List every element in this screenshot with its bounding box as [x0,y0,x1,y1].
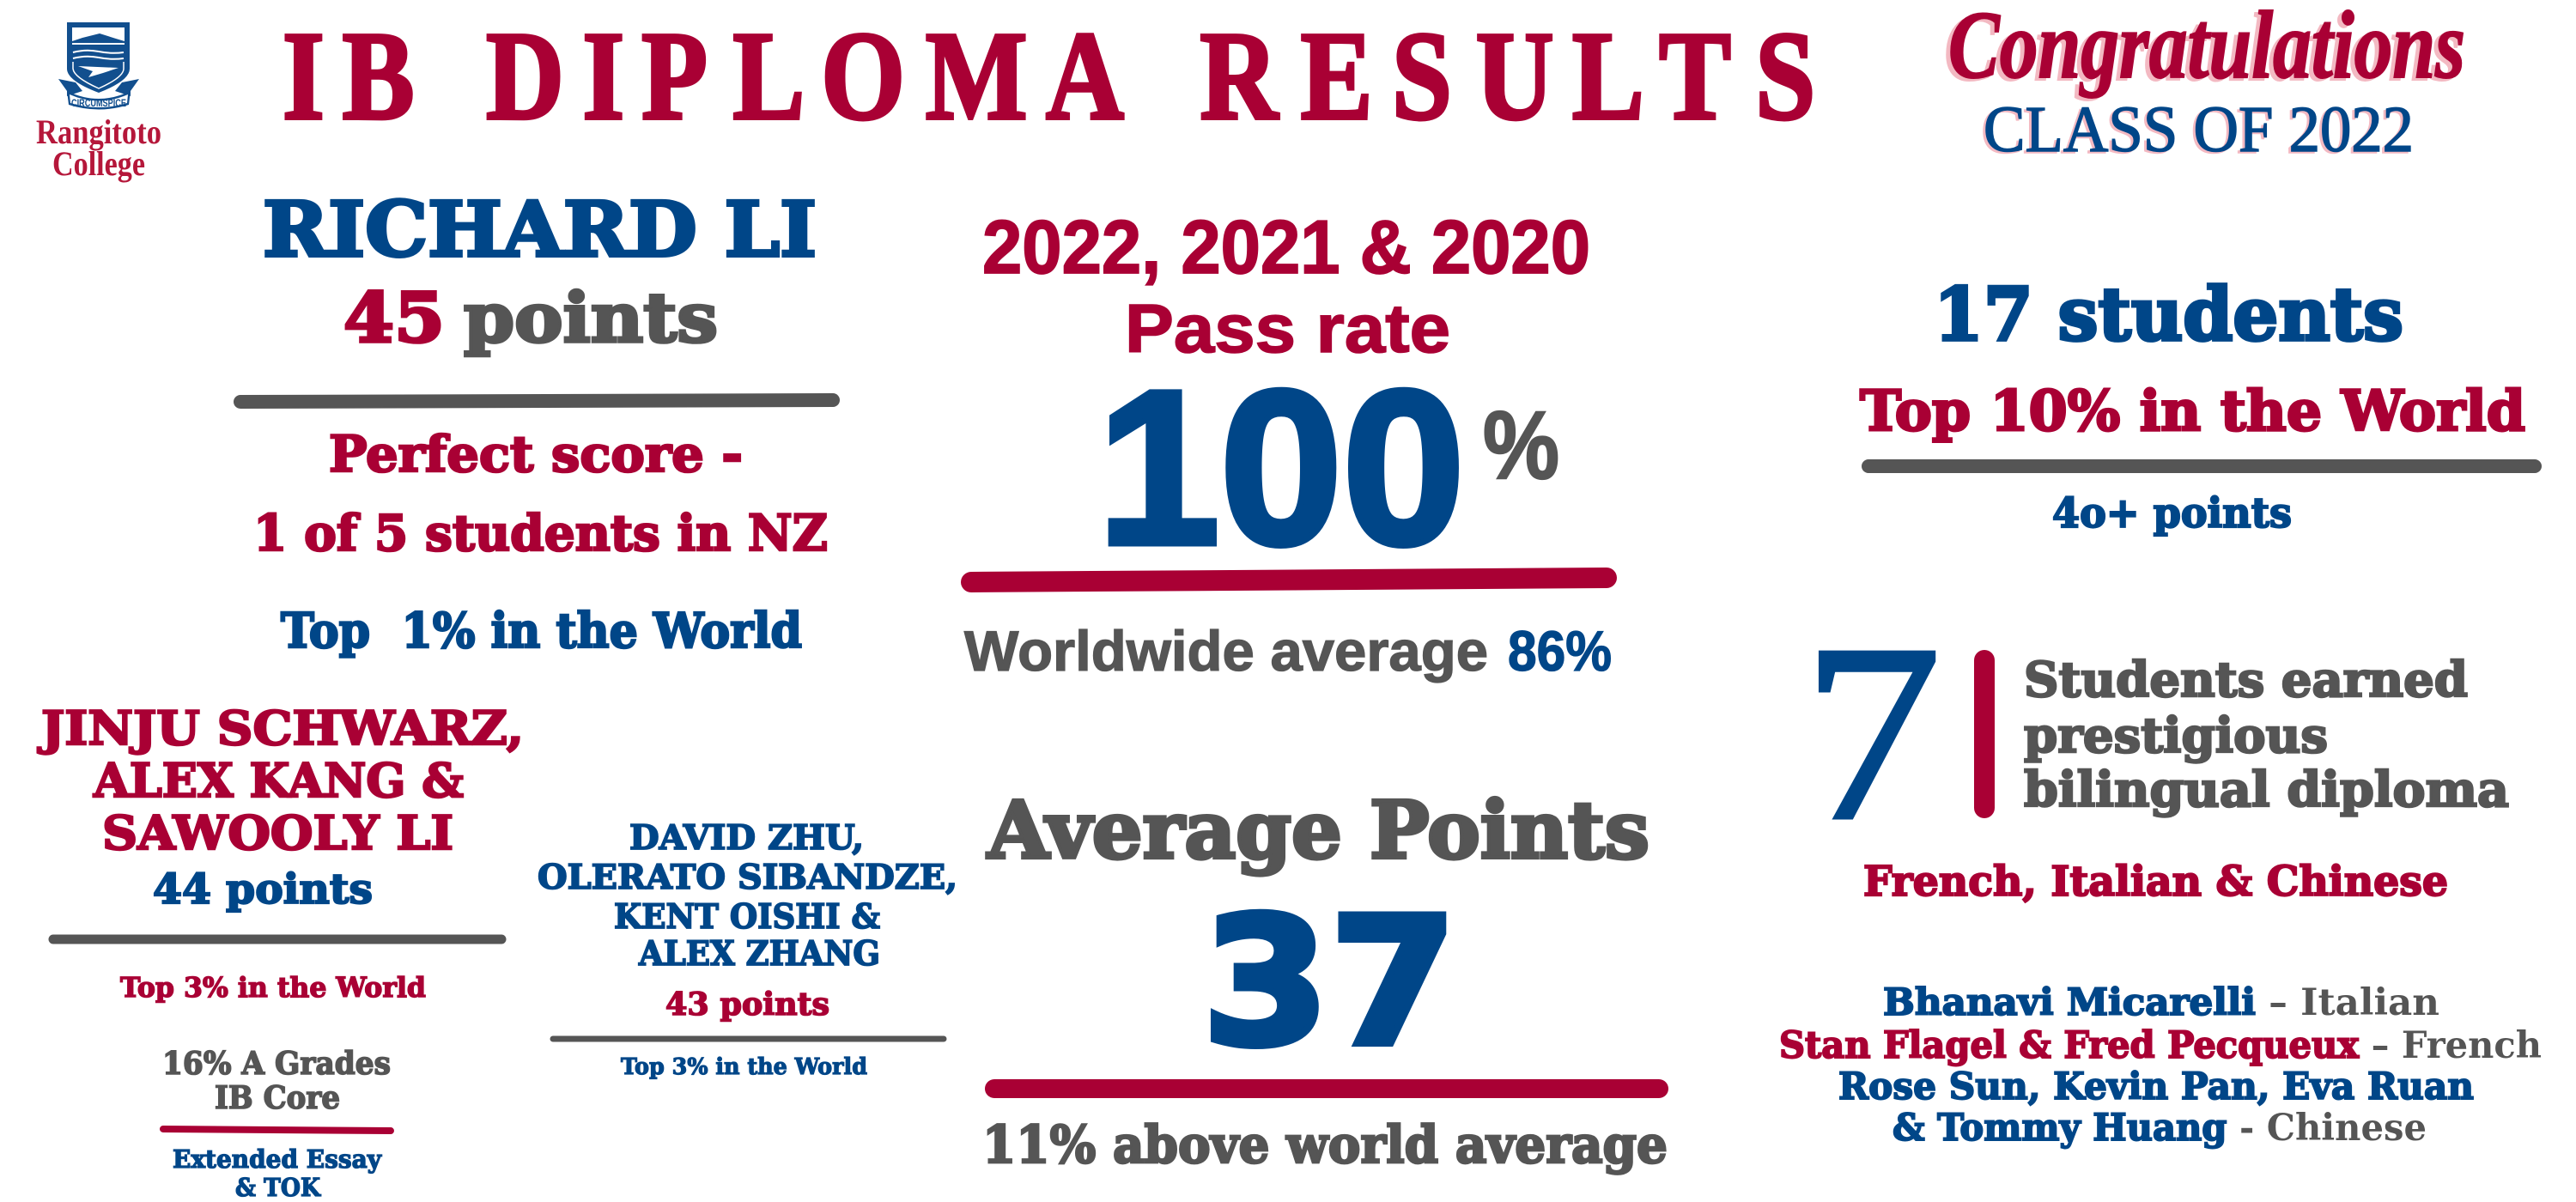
panel: bilingual students: Bhanavi Micarelli – Italian [1883,981,2439,1024]
panel: 17 students: 17 students [1934,272,2403,358]
icon: school crest: CIRCUMSPICE [71,97,126,109]
panel: bilingual diploma: French, Italian & Chinese [1863,858,2448,906]
panel: bilingual students [1779,981,2542,1150]
panel: average points: Average Points [987,784,1649,877]
panel: pass rate: Pass rate [1125,290,1450,367]
panel: bilingual students: Rose Sun, Kevin Pan, Eva Ruan [1838,1065,2474,1108]
panel: Richard Li: Perfect score - [329,425,743,483]
panel: pass rate: 86% [1508,619,1612,683]
panel: bilingual diploma [1801,592,2509,906]
panel: 43 point students: Top 3% in the World [621,1054,867,1080]
panel: bilingual students: & Tommy Huang - Chinese [1893,1107,2427,1150]
panel: bilingual diploma: bilingual diploma [2024,762,2509,818]
panel: Richard Li: Top 1% in the World [281,603,802,659]
panel: Richard Li: 45 [343,277,445,358]
congratulations heading [1948,0,2465,166]
title: IB DIPLOMA RESULTS [283,6,1815,146]
panel: 44 point students: JINJU SCHWARZ, [38,701,524,756]
panel: 44 point students: & TOK [235,1173,322,1202]
panel: average points: 11% above world average [982,1115,1668,1175]
congratulations heading: CLASS OF 2022 [1984,94,2414,166]
panel: bilingual students: Stan Flagel & Fred Pecqueux – French [1779,1024,2542,1067]
panel: 43 point students: 43 points [665,986,829,1023]
panel: pass rate: Worldwide average [964,619,1488,683]
big number: 100: 100 [1097,345,1465,591]
panel: 44 point students: 44 points [153,865,373,914]
logo: Rangitoto College [36,22,161,183]
panel: bilingual diploma: 7 [1801,592,1942,874]
panel: 44 point students: SAWOOLY LI [102,805,453,860]
panel: 43 point students: DAVID ZHU, [629,818,864,858]
panel: 17 students [1860,272,2535,537]
logo name: Rangitoto [36,112,161,151]
panel: 44 point students: 16% A Grades [162,1046,391,1082]
panel: bilingual diploma: Students earned [2024,652,2468,708]
panel: 44 point students: Extended Essay [173,1144,382,1174]
panel: 44 point students: Top 3% in the World [120,971,426,1004]
panel: 43 point students: ALEX ZHANG [638,934,880,974]
panel: Richard Li: RICHARD LI [263,185,817,274]
big number: 37: 37 [1202,881,1457,1085]
panel: 17 students: 4o+ points [2052,489,2292,537]
panel: 44 point students: IB Core [215,1080,340,1116]
panel: Richard Li: points [464,277,718,358]
panel: 17 students: Top 10% in the World [1860,379,2525,444]
panel: Richard Li [240,185,833,659]
panel: pass rate: % [1483,392,1559,499]
logo name [36,112,161,183]
panel: pass rate: 2022, 2021 & 2020 [982,204,1590,289]
panel: bilingual diploma: prestigious [2024,707,2328,764]
panel: average points [982,784,1668,1175]
panel: 44 point students: ALEX KANG & [93,753,464,808]
panel: 43 point students: OLERATO SIBANDZE, [538,858,957,897]
panel: pass rate [964,204,1612,683]
panel: 43 point students [538,818,957,1080]
icon: school crest [58,22,139,110]
panel: 44 point students [38,701,524,1202]
panel: 43 point students: KENT OISHI & [614,897,880,937]
logo name: College [52,144,145,183]
panel: Richard Li: 1 of 5 students in NZ [253,504,828,562]
